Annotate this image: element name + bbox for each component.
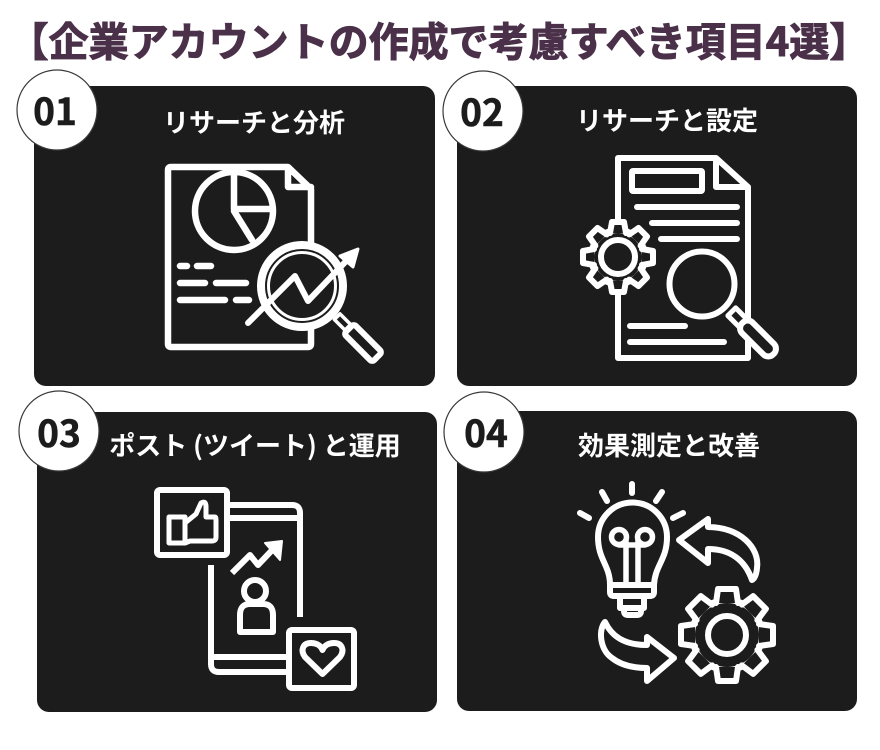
panel: 04 measurement and improvement bbox=[444, 392, 857, 711]
panel: 02 research and setting bbox=[443, 71, 857, 386]
heading 02: リサーチと設定 bbox=[576, 101, 758, 138]
icon: light bulb, arrows and gear bbox=[580, 484, 773, 681]
number badge 02 bbox=[443, 71, 523, 151]
heading 04: 効果測定と改善 bbox=[578, 426, 760, 463]
panel: 03 posts and operation bbox=[19, 391, 437, 712]
title: 【企業アカウントの作成で考慮すべき項目4選】 bbox=[9, 10, 869, 68]
number badge 01: 01 bbox=[33, 82, 77, 136]
panel: 01 research and analysis bbox=[17, 70, 435, 386]
number badge 02: 02 bbox=[460, 83, 504, 137]
heading 03: ポスト (ツイート) と運用 bbox=[109, 426, 401, 463]
number badge 03 bbox=[19, 391, 99, 471]
number badge 04 bbox=[444, 392, 524, 472]
icon: document with pie chart and magnifier bbox=[168, 167, 382, 362]
number badge 01 bbox=[17, 70, 97, 150]
number badge 04: 04 bbox=[464, 404, 508, 458]
gear bbox=[583, 222, 653, 292]
heading 01: リサーチと分析 bbox=[163, 103, 345, 140]
number badge 03: 03 bbox=[37, 404, 81, 458]
icon: smartphone with like, growth, user and heart bbox=[157, 490, 354, 688]
icon: document with gear and magnifier bbox=[583, 158, 779, 359]
gear bbox=[681, 589, 773, 681]
